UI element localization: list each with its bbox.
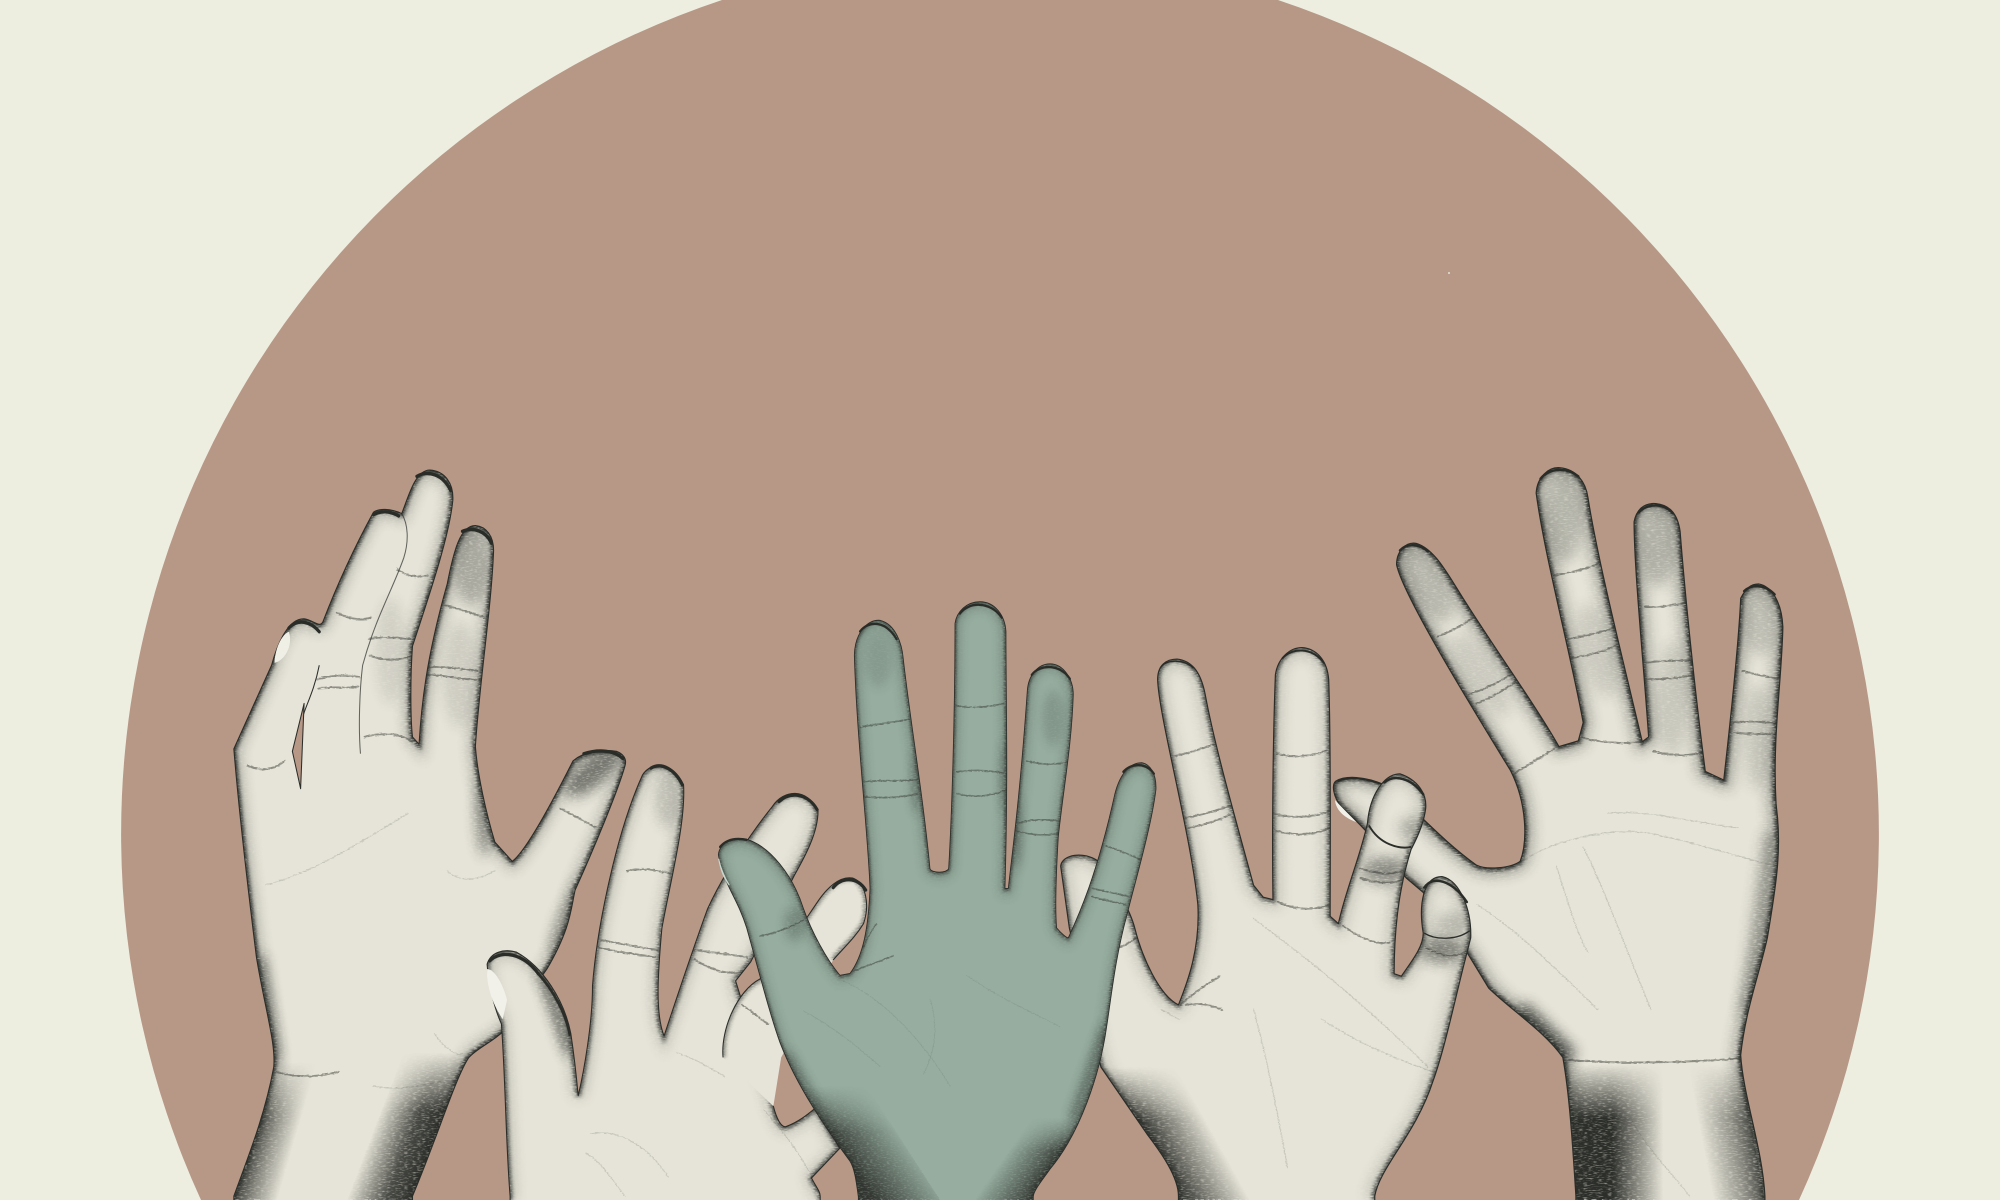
hand 2: second from left, pale hand with bent thumb (487, 765, 867, 1200)
shading on green hand (718, 602, 1156, 1200)
shading on hand 2 (487, 765, 840, 1200)
hand 4: right of centre, pale hand with curled fingers (1061, 648, 1471, 1200)
small speck on circle (1448, 272, 1450, 274)
outline and fingertip shadows of green hand (718, 602, 1156, 1200)
shading on hand 5 (1333, 468, 1783, 1200)
outline and fingertip shadows of hand 1 (234, 470, 626, 1200)
shading on hand 1 (234, 470, 627, 1200)
outline and fingertip shadows of hand 2 (487, 765, 840, 1200)
hand 3: centre hand in sage green (718, 602, 1156, 1200)
shading on hand 4 (1061, 648, 1471, 1200)
outline and fingertip details of hand 4 (1061, 648, 1471, 1200)
back finger outline (723, 878, 867, 1057)
hand 1: far left, pale hand (234, 470, 627, 1200)
hand 5: far right, pale hand with dark wrist (1333, 468, 1783, 1200)
outline and fingertip shadows of hand 5 (1333, 468, 1783, 1200)
back finger of hand 2 (723, 878, 867, 1057)
